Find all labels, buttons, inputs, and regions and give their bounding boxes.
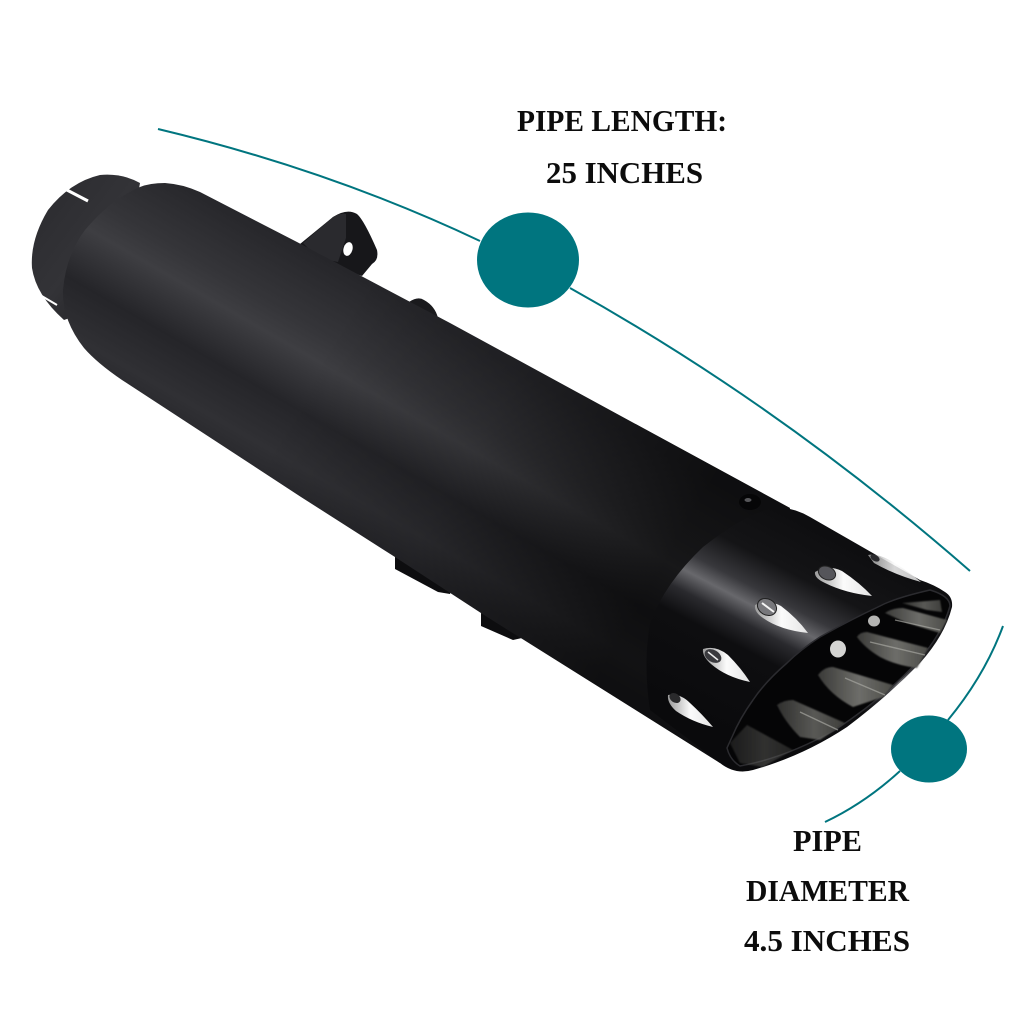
product: black exhaust muffler pipe: [32, 175, 952, 771]
fin 5: [777, 700, 845, 740]
label: pipe length: [517, 103, 727, 190]
mounting bracket: lower rear: [481, 613, 522, 640]
label: pipe diameter: PIPE: [793, 823, 862, 858]
length callout arc and marker: [158, 129, 970, 571]
mounting bracket: lower front: [395, 557, 452, 594]
mounting bracket: top: [300, 212, 377, 276]
angled tip band: [646, 508, 952, 771]
diameter callout arc and marker: [825, 626, 1003, 822]
slot 2: [702, 646, 750, 682]
pipe main body: [63, 183, 790, 763]
label: pipe diameter: 4.5 INCHES: [744, 923, 910, 958]
mounting stud: top: [409, 298, 438, 318]
fin 1: [902, 600, 942, 612]
slot 1: [668, 691, 713, 727]
fin 6: [730, 725, 793, 767]
pipe neck with slots: [32, 175, 140, 320]
tip mouth with inner fins: [727, 590, 950, 767]
slot 5: [868, 553, 921, 582]
bullet vent slots: [668, 553, 921, 727]
label: pipe diameter: DIAMETER: [746, 873, 910, 908]
fin 4: [818, 667, 893, 707]
label: pipe length: 25 INCHES: [546, 155, 703, 190]
bolt above tip band: [739, 494, 761, 510]
fin 3: [857, 632, 928, 668]
label: pipe diameter: [744, 823, 910, 958]
fin 2: [885, 608, 947, 633]
slot 3: [754, 595, 808, 633]
slot 4: [815, 563, 872, 596]
label: pipe length: PIPE LENGTH:: [517, 103, 727, 138]
